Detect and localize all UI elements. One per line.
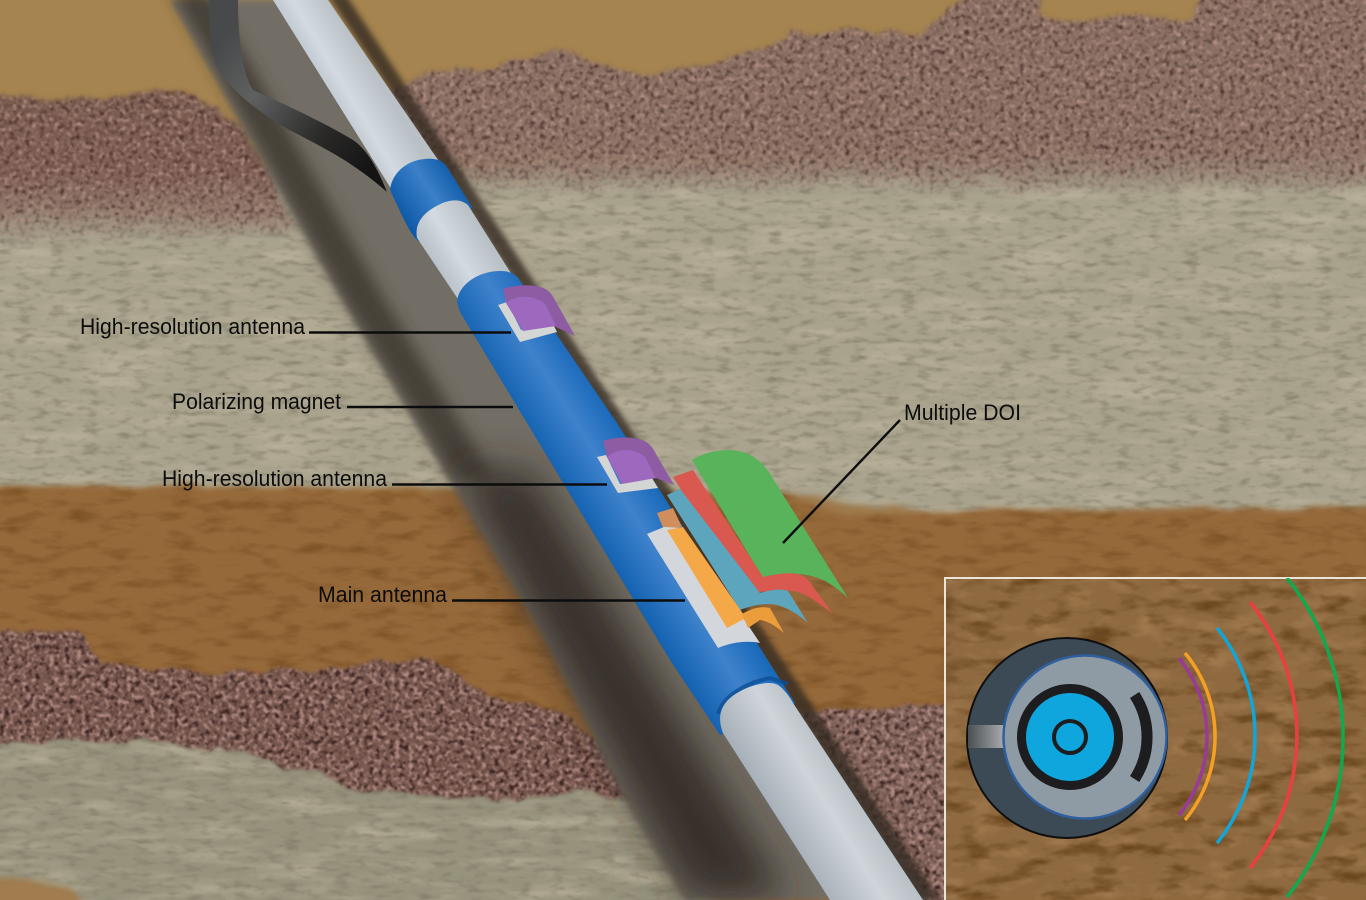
stratum: lower cream sandstone (0, 730, 720, 900)
magnet core (1022, 688, 1118, 786)
label: high-resolution antenna (upper): High-resolution antenna (80, 314, 306, 339)
antenna pad (498, 302, 557, 342)
tool body (1004, 656, 1166, 818)
purple arc (1179, 658, 1207, 815)
blue arc (1217, 628, 1255, 843)
tool: upper white housing (273, 0, 445, 195)
label: multiple DOI (783, 400, 1021, 543)
purple outer flap (603, 437, 674, 485)
red arc (1250, 602, 1297, 868)
purple inner pad (607, 450, 656, 484)
stratum: brown clay (0, 486, 1366, 900)
purple outer flap (503, 285, 575, 336)
depth of investigation arcs (1179, 578, 1343, 897)
tool: lower white housing (720, 683, 923, 900)
background: tan top stratum (0, 0, 1366, 260)
tool: blue polarizing magnet section (457, 271, 795, 735)
cable entering the tool (209, 0, 387, 192)
main antenna pad (647, 527, 760, 648)
tool: white section between blue collars (417, 200, 512, 305)
inset border (945, 578, 1366, 900)
stratum: upper cream sandstone (0, 150, 1366, 520)
tool cross-section (967, 638, 1167, 838)
label: polarizing magnet: Polarizing magnet (172, 389, 341, 414)
inner conductor (1054, 721, 1086, 753)
orange arc (1185, 653, 1215, 820)
logging tool (273, 0, 923, 900)
stratum: upper gravel right (380, 0, 1366, 230)
label: high-resolution antenna (lower): High-resolution antenna (162, 466, 388, 491)
high-resolution antenna 2 (597, 437, 674, 493)
purple inner pad (506, 297, 556, 331)
teal shell (667, 489, 808, 623)
green shell (692, 450, 848, 598)
stratum: lower gravel left (0, 630, 670, 812)
red shell (673, 470, 833, 614)
antenna pad (597, 455, 658, 493)
borehole shadow (170, 0, 940, 900)
multiple depth of investigation shells (647, 450, 848, 648)
inset panel: cross-section view (945, 578, 1366, 900)
stratum: upper gravel left (0, 88, 300, 245)
green arc (1287, 578, 1343, 897)
high-resolution antenna 1 (498, 285, 575, 342)
sensor slot (968, 725, 1003, 748)
label: main antenna: Main antenna (318, 582, 448, 607)
orange shell upper piece (657, 508, 682, 530)
orange inner pad (667, 527, 746, 628)
stratum: lower gravel right (790, 705, 960, 900)
inset background (945, 578, 1366, 900)
borehole disc (967, 638, 1167, 838)
tool: lower collar seam (718, 678, 788, 714)
label: multiple DOI: Multiple DOI (904, 400, 1021, 425)
tool: upper blue collar (390, 159, 472, 242)
antenna arc (1135, 695, 1147, 779)
orange flap (742, 607, 784, 633)
